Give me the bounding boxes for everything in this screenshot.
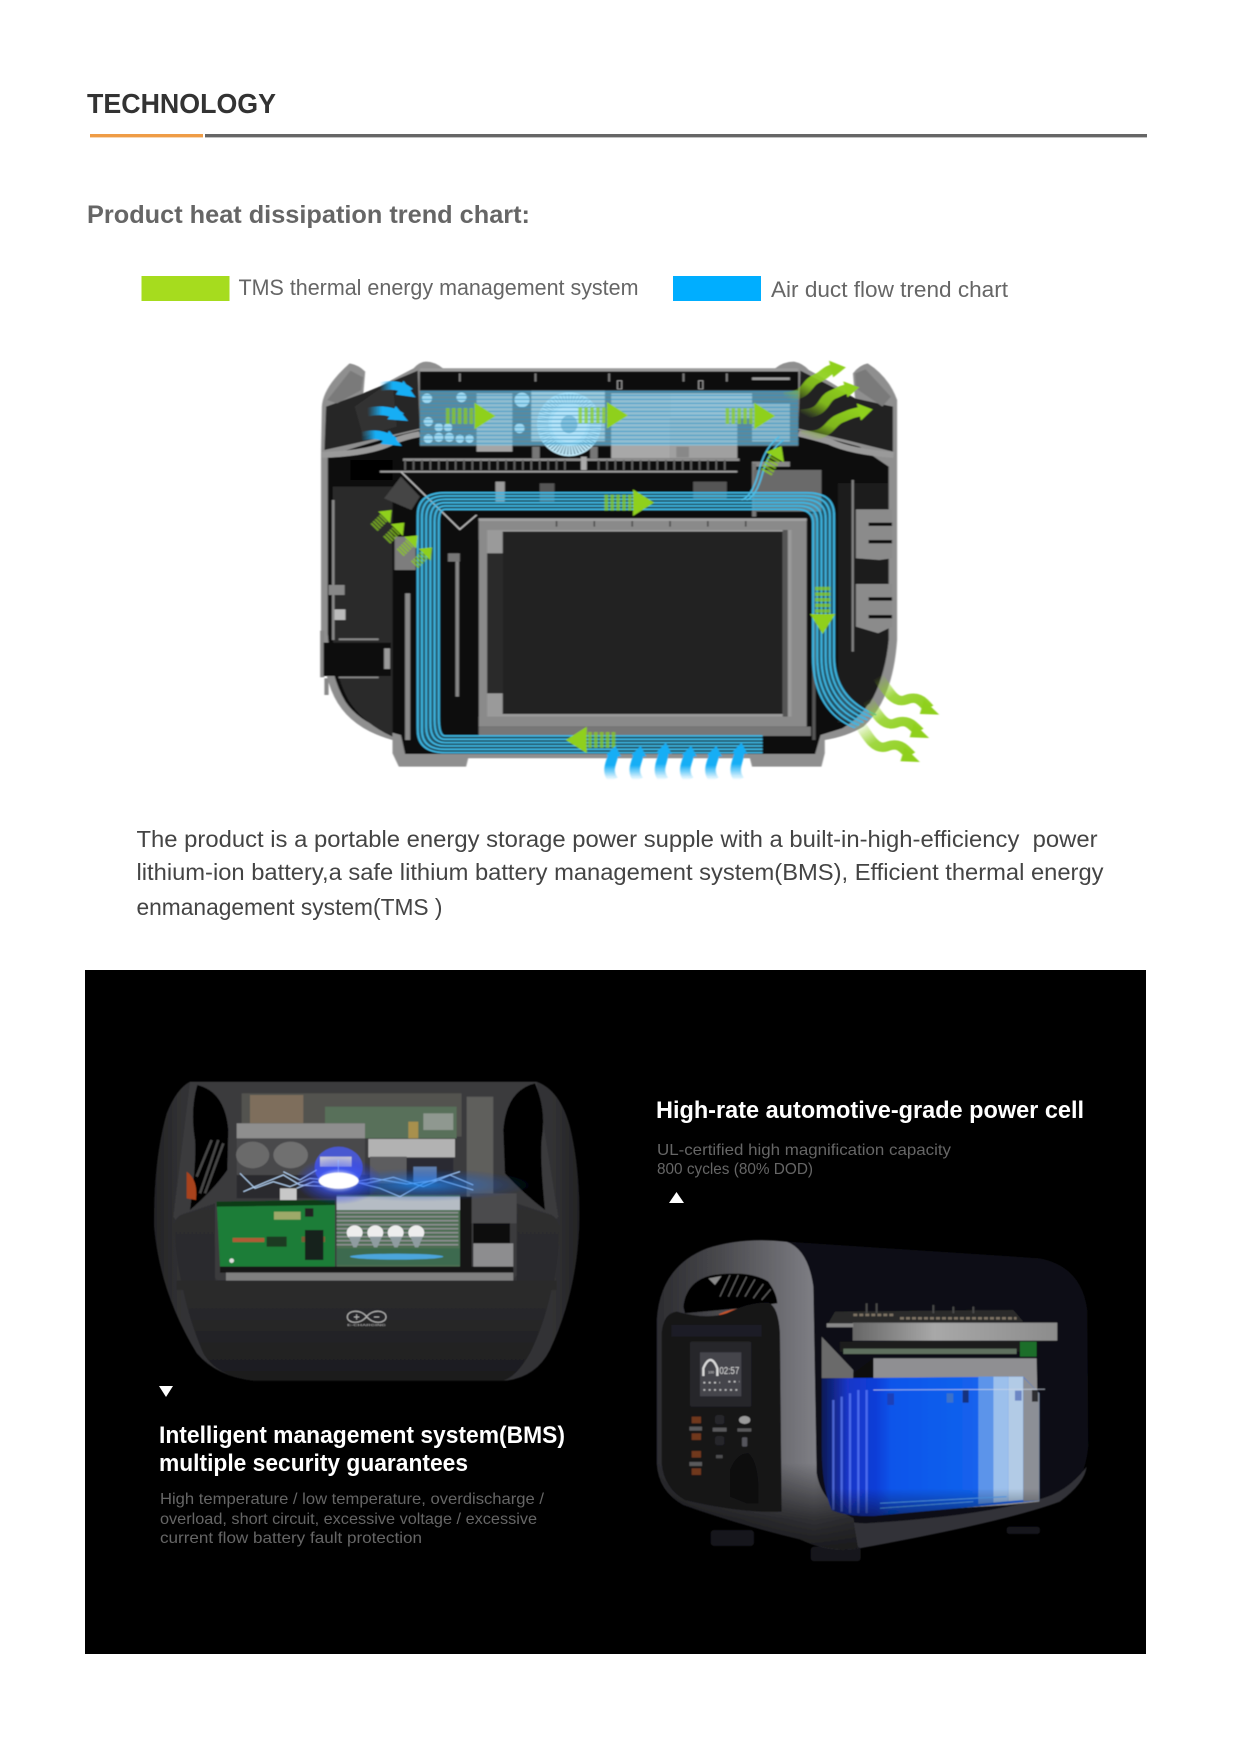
title: TECHNOLOGY <box>87 88 276 119</box>
duct tint <box>428 501 863 744</box>
blue intake arrowheads, left <box>381 381 416 446</box>
inner compartments <box>332 460 888 740</box>
lower rim <box>820 1467 1087 1548</box>
feet <box>711 1527 1040 1561</box>
device body <box>154 1082 579 1381</box>
upper boards <box>827 1303 1057 1357</box>
power cell description: 800 cycles (80% DOD) <box>657 1161 813 1178</box>
BMS description <box>160 1491 545 1547</box>
side stage <box>280 1188 517 1268</box>
legend swatch: TMS <box>142 276 230 301</box>
logo <box>347 1311 386 1327</box>
power cell heading: High-rate automotive-grade power cell <box>656 1097 1084 1124</box>
cross-section diagram <box>320 361 939 780</box>
logo: E-CHARGING <box>347 1323 386 1327</box>
grey frame <box>657 1240 858 1550</box>
description paragraph: enmanagement system(TMS ) <box>136 894 442 920</box>
title underline <box>90 134 1147 137</box>
interior window <box>173 1082 558 1280</box>
blue intake arrows, bottom <box>610 751 739 780</box>
fan <box>537 392 601 456</box>
BMS heading: multiple security guarantees <box>159 1450 468 1477</box>
handle wings <box>322 369 894 455</box>
legend label: air duct: Air duct flow trend chart <box>771 277 1009 302</box>
BMS description: current flow battery fault protection <box>160 1530 422 1547</box>
black feature panel <box>85 970 1146 1654</box>
description paragraph: lithium-ion battery,a safe lithium battery management system(BMS), Efficient thermal energy <box>136 859 1104 885</box>
lower cover <box>173 1203 559 1381</box>
side wedge <box>822 1337 853 1378</box>
green exhaust arrows, top right <box>784 369 862 435</box>
BMS description: overload, short circuit, excessive voltage / excessive <box>160 1511 537 1528</box>
BMS heading <box>159 1422 565 1477</box>
blue intake arrows, left <box>361 385 408 441</box>
riser duct <box>742 437 784 500</box>
power cell device image <box>657 1240 1088 1561</box>
silver battery case <box>853 1358 1039 1513</box>
ports <box>689 1415 759 1503</box>
upper heatsink <box>236 1123 455 1198</box>
BMS heading: Intelligent management system(BMS) <box>159 1422 565 1449</box>
green exhaust arrows, bottom right <box>859 677 929 755</box>
power cell description <box>657 1142 951 1178</box>
pointer: BMS <box>159 1386 173 1397</box>
electric flare <box>295 1157 530 1205</box>
legend swatch: air duct <box>673 276 761 301</box>
description paragraph: The product is a portable energy storage power supple with a built-in-high-efficiency power <box>136 826 1098 852</box>
green exhaust arrowheads, bottom right <box>900 700 939 762</box>
heading: heat dissipation chart: Product heat dissipation trend chart: <box>87 201 530 229</box>
shell interior <box>328 372 889 754</box>
left ports <box>320 585 391 695</box>
front panel <box>662 1303 782 1512</box>
description paragraph <box>136 826 1104 920</box>
display <box>690 1342 751 1407</box>
board comb <box>380 457 821 529</box>
top housing <box>420 368 798 458</box>
display: 100 <box>708 1370 714 1374</box>
battery frame <box>479 518 811 736</box>
handle opening <box>683 1273 777 1315</box>
black ears <box>187 1083 545 1210</box>
lower heatsink <box>337 1195 460 1267</box>
left bracket <box>441 540 479 717</box>
duct strands <box>418 493 876 753</box>
power cell description: UL-certified high magnification capacity <box>657 1142 951 1159</box>
green flow arrows <box>368 402 835 753</box>
green exhaust arrowheads, top right <box>829 361 873 421</box>
device shell <box>321 362 897 767</box>
pointer: power cell <box>669 1192 684 1203</box>
top air tint and stripes <box>420 391 798 446</box>
green control board <box>217 1200 335 1267</box>
legend <box>142 275 1009 302</box>
blue sphere <box>315 1147 363 1188</box>
legend label: TMS: TMS thermal energy management system <box>238 275 638 300</box>
blue battery cells <box>822 1377 1045 1516</box>
rear boards <box>242 1093 493 1197</box>
right connectors <box>856 509 892 633</box>
display: 02:57 <box>719 1366 740 1377</box>
blue intake arrowheads, bottom <box>606 743 747 757</box>
BMS device image <box>154 1082 579 1381</box>
chassis tray <box>177 1267 557 1290</box>
device body <box>657 1240 1088 1550</box>
capacitors <box>422 392 530 443</box>
lightning <box>240 1160 473 1197</box>
BMS description: High temperature / low temperature, overdischarge / <box>160 1491 545 1508</box>
